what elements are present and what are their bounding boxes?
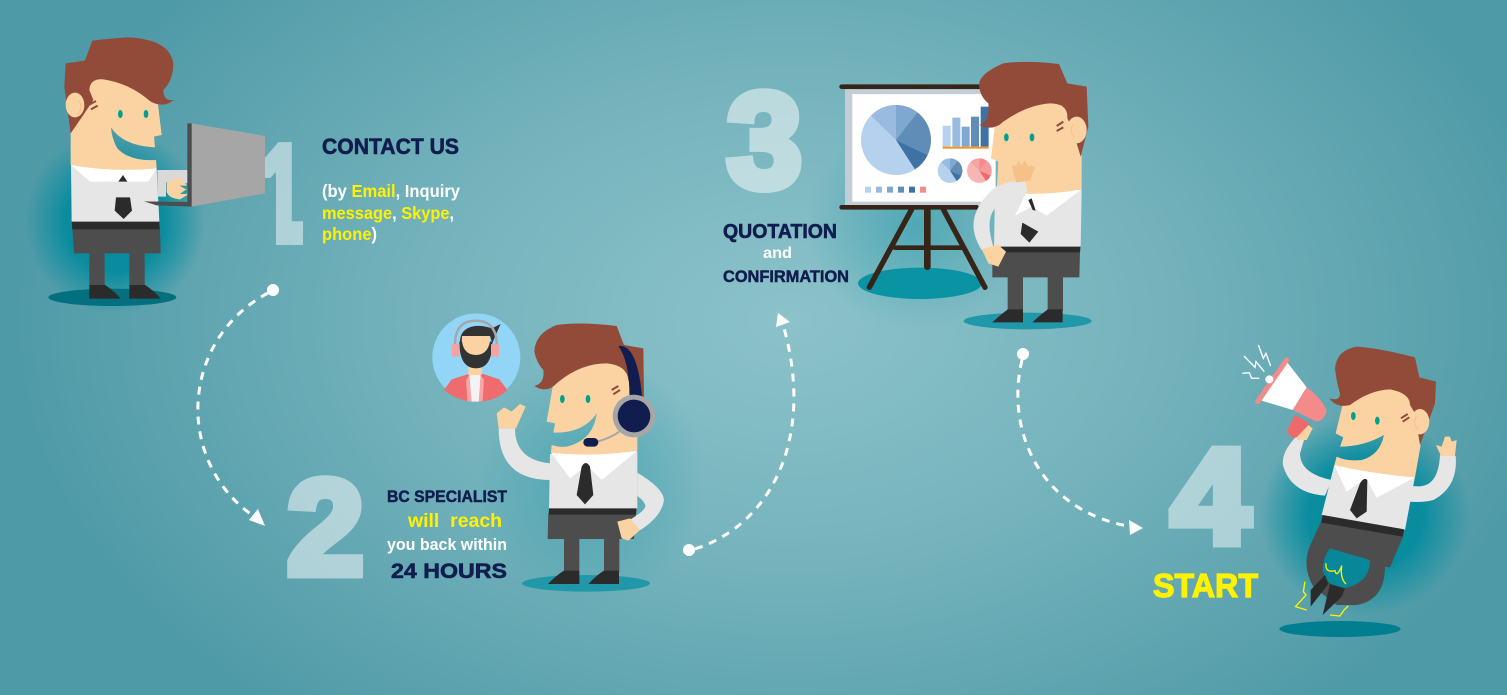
number 2: 2 [287,452,364,603]
shirt with collar and tie [549,451,637,508]
head [71,77,162,170]
trousers and belt [548,507,637,539]
line: you back within: you back within [387,535,507,554]
shirt with belt, collar and tie [1321,465,1415,537]
presentation easel with charts [842,87,996,299]
megaphone with hand [1258,360,1327,440]
body: contact channels: phone) [322,224,377,244]
body: contact channels: (by Email, Inquiry [322,181,460,201]
chart legend squares [865,187,926,193]
ground shadow [1279,621,1401,637]
face details [66,93,148,118]
shirt with collar and tie [994,189,1082,247]
easel shadow [858,268,982,299]
head [991,100,1082,194]
right hand [1436,437,1457,456]
large pie chart [861,105,931,175]
shoes [1311,575,1345,615]
arrow 2 to 3 [683,313,794,556]
shirt with collar and tie [71,165,159,222]
character 4: jumping man with megaphone [1242,345,1457,637]
hair [979,62,1088,157]
line: bc specialist: BC SPECIALIST [387,488,507,506]
step 4 heading: start: START [1153,567,1258,604]
line: 24 hours: 24 HOURS [391,560,507,583]
headset [583,346,655,447]
arrow 1 to 2 [198,284,279,526]
trousers and belt [72,221,161,253]
ground shadow [522,575,650,592]
raised arm and hand [497,404,551,480]
hair [64,37,174,133]
line: quotation: QUOTATION [723,221,837,243]
board [842,87,996,207]
line: will reach: will reach [407,511,502,532]
arm and hand [157,170,190,199]
easel legs [869,209,985,287]
legs and shoes [548,538,619,584]
character 2: man with headset [497,324,664,592]
head [547,357,637,455]
body: contact channels [322,181,460,244]
bar chart [943,107,989,149]
character 3: thinking man [964,62,1092,329]
heading: contact us: CONTACT US [322,134,459,159]
sound lines [1242,345,1271,378]
laptop [144,123,265,207]
face details [1004,117,1087,143]
number 4: 4 [1171,421,1250,572]
arms [1283,436,1456,502]
legs and shoes [89,253,161,299]
motion sparks [1295,563,1348,616]
face details [1351,409,1429,434]
trousers and belt [992,245,1081,277]
body: contact channels: message, Skype, [322,203,454,223]
ground shadow [48,289,176,306]
number 3: 3 [727,65,802,216]
line: confirmation: CONFIRMATION [723,267,849,286]
step 2 text [387,488,507,583]
hip arm and hand [617,473,664,541]
character 1: man with laptop [48,37,265,306]
step 3 text [723,221,849,286]
head [1334,387,1421,477]
trousers [1306,522,1403,605]
arm and hands [974,160,1035,267]
line: and: and [763,245,792,262]
hair [1329,347,1436,445]
avatar: customer specialist [432,313,520,402]
hair [534,324,644,403]
small red pie [967,158,992,183]
arrow 3 to 4 [1017,348,1143,535]
small blue pie [938,158,962,183]
ground shadow [964,313,1092,329]
legs and shoes [992,277,1063,322]
step 1 text [322,134,460,244]
number 1: 1 [261,118,303,269]
